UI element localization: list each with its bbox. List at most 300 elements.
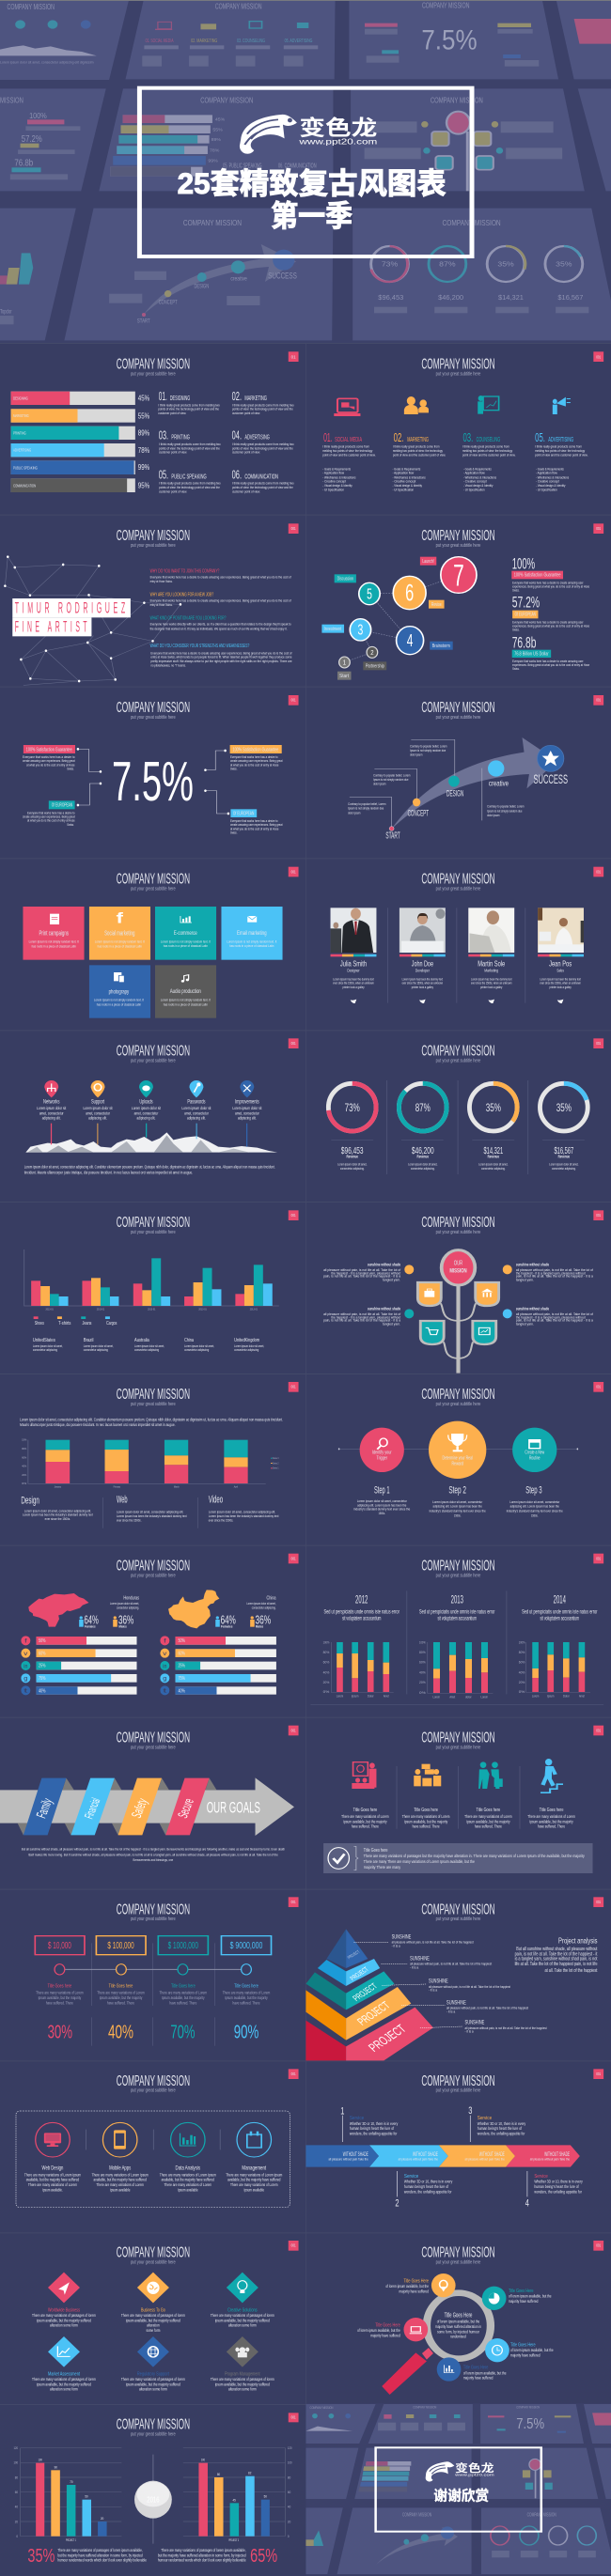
panel: road to success slide (348, 695, 603, 841)
pyramid notes: - it is a (410, 1965, 419, 1969)
heading: put your great subtitle here (131, 2260, 176, 2265)
heading (421, 1042, 495, 1063)
pin: improvements: amet, consectetur (235, 1111, 259, 1116)
bubble labels: Investment (324, 627, 341, 632)
diamond: business to go: Business To Go (141, 2308, 165, 2313)
statistics: 57.2% (512, 594, 540, 611)
milestone text: have suffered. There (107, 2001, 134, 2006)
chevron band: all pleasure without pain Take the (530, 2157, 570, 2162)
intro text: Lorem ipsum dolor sit amet, consectetur adipiscing elit. Curabitur elementum posuere pretium. Quisque nibh dolor, dignissim ac dignissim ut, luctus ac urna. Aliquam aliquet non massa quis tincidunt. (20, 1418, 283, 1422)
marker 4: human being's heart the lure of (534, 2184, 579, 2190)
page badge: 001 (291, 2072, 296, 2077)
skill: web design: available, but the majority have suffered (26, 2178, 79, 2182)
country notes: consectetur adipiscing (134, 1347, 159, 1352)
milestone notes: Ipsum is not simply random due (373, 777, 409, 782)
name card (12, 598, 131, 636)
pin: networks: adipiscing elit. (42, 1116, 61, 1121)
bar chart: 2013-01 (97, 1308, 104, 1311)
heading: put your great subtitle here (131, 887, 176, 892)
numbered services text: I think really great products come from melding two (159, 481, 221, 486)
note: top left: the happiest - it is a tangled yarn, pleasures without (331, 1271, 401, 1275)
numbered services text: customer point of view. (159, 450, 187, 455)
page badge (289, 1210, 299, 1220)
faded slide previews: COMPANY MISSION (200, 96, 253, 105)
legend: Cargos (106, 1321, 117, 1327)
faded previews: COMPANY MISSION (413, 2405, 436, 2409)
faded slide previews: 05. PUBLIC SPEAKING (223, 162, 262, 169)
chevron band: all pleasure without pain Take the (399, 2157, 438, 2162)
stacked bar chart (22, 1438, 266, 1488)
marker 1: 1 (340, 2105, 345, 2117)
faded slide previews: 87% (439, 260, 456, 268)
tile: audio production: has roots in a piece of classical Latin (164, 1002, 208, 1006)
chart: 2012: Ipsum (352, 1694, 359, 1699)
marker 2 (395, 2171, 453, 2209)
diamond: creative solutions (211, 2273, 274, 2328)
icon: presenter (352, 1762, 376, 1789)
milestone notes: dolor ipsum (373, 782, 386, 786)
team member: Martin Sole: Lorem Ipsum has been the dummy text (471, 977, 512, 981)
ring: 35 percent orange: 35% (486, 1101, 501, 1114)
service columns: melding two points of view: the technology (462, 448, 513, 453)
faded previews: 7.5% (516, 2415, 544, 2432)
pin: networks (37, 1080, 67, 1121)
milestone text: There are many variations of Lorem (36, 1991, 84, 1995)
chart: 2013: Lorem (481, 1695, 488, 1699)
bubble labels: Launch! (422, 559, 434, 565)
faded slide previews: 35% (497, 260, 514, 268)
service columns: I think really great products come from (322, 444, 369, 449)
callout: european left: Everyone that works here has a desire to (27, 811, 75, 815)
demographics: China (215, 1596, 276, 1628)
chart: project 1: 20 (15, 2520, 19, 2523)
chart: project 1: 50 (85, 2494, 88, 2499)
numbered services text: 03. (159, 429, 168, 442)
stacked bar chart: 40% (22, 1465, 26, 1468)
page badge (289, 1382, 299, 1392)
heading: put your great subtitle here (131, 1574, 176, 1578)
summary right: but the majority have suffered alteration in some form, by injected (158, 2553, 246, 2558)
numbered services text: 06. (232, 469, 242, 482)
service columns: - Application flow (322, 471, 345, 475)
tile: print campaigns: Lorem Ipsum is not simply random text. It (29, 939, 79, 944)
pin: uploads (132, 1080, 161, 1121)
figure captions: Title Goes here (414, 1808, 438, 1813)
chart: 2014: Dolor (563, 1694, 570, 1699)
ring: 73 percent: consectetur adipiscing. (340, 1166, 365, 1171)
pin: passwords: Passwords (187, 1099, 206, 1105)
skill: web design: There are many variations of Lorem (28, 2182, 77, 2188)
faded slide previews: 73% (382, 260, 399, 268)
service columns: 01. (323, 431, 333, 445)
amounts: $ 1000,000 (168, 1941, 198, 1951)
magnifier glass: some form, by injected humour (437, 2330, 479, 2335)
country notes: consectetur adipiscing (234, 1347, 259, 1352)
skill: management (226, 2122, 282, 2193)
callout: european right: Swiss. (230, 830, 237, 835)
social bars: Honduras: g (24, 1676, 28, 1682)
country notes: UnitedStates (33, 1338, 55, 1343)
panel: money timeline slide: COMPANY MISSION (117, 1901, 190, 1917)
leader lines (350, 739, 482, 827)
questions and answers: entry at Hose Swiss, which tends to put people forced to fit. When talented people fit we'll together they produce some (150, 655, 292, 660)
pyramid notes: all pleasure without pain, is not life at all. Take the lot of the happiest (465, 2025, 547, 2030)
bubble chain: 4 (407, 631, 414, 650)
service columns: - Creative concept (392, 479, 416, 484)
country notes: consectetur adipiscing (84, 1347, 108, 1352)
team member: John Doe: Developer (415, 969, 430, 973)
callout: satisfaction left: at what you do is the cost of entry at Hose (26, 763, 75, 767)
ribbon folds (18, 1778, 216, 1835)
pin: support: Support (91, 1099, 104, 1105)
service columns: - Goals & Requirements (463, 467, 492, 471)
bar chart: 2013-01 (148, 1308, 155, 1311)
panel: yearly charts slide: COMPANY MISSION (421, 1557, 495, 1574)
heading: put your great subtitle here (436, 887, 480, 892)
figure captions: Title Goes here (540, 1808, 563, 1813)
summary left (27, 2544, 147, 2566)
icon: megaphone (553, 397, 571, 414)
bubble labels: Start (339, 674, 349, 679)
brand logo small: 变色龙 (455, 2461, 494, 2475)
tile: social marketing: has roots in a piece of classical Latin (98, 944, 142, 949)
chart: project 1: 100 (39, 2458, 42, 2462)
faded slide previews: CONCEPT (159, 298, 178, 305)
pyramid notes: all pleasure without pain, is not life at all. Take the lot of the happiest (392, 1940, 474, 1945)
summary right: 65% (250, 2544, 277, 2566)
name card: FINE ARTIST (15, 618, 90, 635)
skill: management: available, but the majority have suffered (227, 2178, 281, 2182)
caption (22, 1847, 285, 1862)
tile: photography: photograpy (109, 987, 129, 995)
heading: put your great subtitle here (436, 2088, 480, 2093)
page badge (593, 1382, 603, 1392)
bubble labels: Partnership (366, 663, 384, 669)
page badge (289, 1038, 299, 1048)
panel: pyramid slide (306, 1897, 603, 2060)
panel: money timeline slide (35, 1897, 299, 2046)
faded slide previews: 76.8b (14, 159, 33, 168)
ring: 35 percent orange (469, 1083, 517, 1171)
progress bars: 45% (138, 394, 150, 402)
chart: project 1 (14, 2445, 121, 2542)
diamond: market assessment: ipsum available, but the majority suffered (37, 2382, 91, 2387)
callout: european right: Of EUROPEAN (233, 812, 254, 816)
statistics: Swiss. (512, 666, 520, 671)
milestone notes: Contrary to popular belief, Lorem (487, 804, 525, 809)
diamond: program management: Program Management (225, 2372, 260, 2377)
country notes: Lorem ipsum dolor sit amet, (134, 1343, 164, 1348)
diamond: creative solutions: There are many variations of passages of lorem (211, 2313, 274, 2319)
summary left: humour randomised words which don't look even slightly believable (57, 2558, 147, 2563)
service columns: - Visual design & Identity (463, 483, 494, 488)
faded slide previews (0, 2, 611, 324)
caption: Lorem ipsum dolor sit amet, consectetur adipiscing elit. Curabitur elementum posuere pretium. Quisque nibh dolor, dignissim ac dignissim ut, luctus ac urna. Aliquam aliquet non massa quis tincidunt. (24, 1165, 275, 1170)
panel: four skills slide (16, 2069, 299, 2208)
panel: projects chart slide (14, 2413, 299, 2566)
connector dots (77, 748, 229, 815)
marker 2: wonders, the unfailing appetite for (404, 2190, 452, 2195)
pin: support: adipiscing elit. (88, 1116, 107, 1121)
chart: 2013: sit voluptatem accusantium (438, 1616, 477, 1622)
panel: goals arrow slide (0, 1726, 299, 1862)
team member: Julia Smith: Designer (347, 969, 360, 973)
dashed frame (16, 2111, 290, 2208)
step 2: Determine your Real (443, 1456, 473, 1461)
tile: social marketing: f (117, 909, 123, 926)
panel: mountain pins slide (24, 1038, 299, 1175)
progress bars: PUBLIC SPEAKING (13, 466, 38, 471)
pyramid notes: - it is a (446, 2010, 456, 2013)
tile: print campaigns: has roots in a piece of classical Latin (32, 944, 76, 949)
milestone text: have suffered. There (46, 2001, 73, 2006)
row group: slides 21-24 (16, 2069, 603, 2395)
marker 1: Service (350, 2116, 365, 2121)
faded slide previews: 03. COUNSELING (237, 39, 265, 44)
stacked bar chart: March (174, 1485, 180, 1488)
demographics: Honduras: Honduras (123, 1596, 139, 1601)
questions and answers: entry at Hose Swiss. (150, 579, 173, 583)
questions and answers: the designer that worked on it. It's key as individuals. We spend as much of our life working that we'd best enjoy it. (150, 627, 288, 630)
step 1: Identify your (372, 1451, 392, 1455)
team member: Martin Sole (468, 908, 514, 1003)
big grey arrow (0, 1777, 294, 1836)
tile: email marketing: has roots in a piece of classical Latin (229, 943, 274, 948)
faded slide previews: 35% (556, 260, 572, 268)
page badge (289, 2413, 299, 2422)
social bars: Honduras: 40% (39, 1689, 46, 1694)
icon: people (404, 396, 429, 414)
heading (117, 1901, 190, 1922)
pyramid tier 5: PROJECT (366, 2023, 410, 2055)
service columns: I think really great products come from (462, 444, 509, 449)
progress bars: 55% (138, 411, 150, 420)
chart: project 1: 100 (14, 2460, 19, 2465)
chart: project 1: 60 (15, 2490, 19, 2494)
legend: Jeans (82, 1321, 91, 1327)
note: top right (503, 1263, 593, 1282)
panel: tiles slide: COMPANY MISSION (117, 870, 190, 887)
diamond: business to go: some form (146, 2328, 161, 2334)
panel: mountain pins slide: COMPANY MISSION (117, 1042, 190, 1059)
pyramid notes: - it is a (429, 1988, 438, 1993)
diamond: worldwide business: There are many variations of passages of lorem (32, 2313, 96, 2319)
faded slide previews: 06. COMMUNICATION (278, 162, 317, 169)
numbered services text: customer point of view. (232, 411, 260, 415)
marker 1 (340, 2105, 398, 2142)
chart: 2012: 0% (323, 1689, 330, 1694)
heading (117, 1042, 190, 1063)
bubble chain: 6 (405, 580, 414, 606)
chart: 2012: Amet (384, 1694, 389, 1699)
magnifier glass: of lorem ipsum available, but the (437, 2320, 479, 2324)
numbered services text: customer point of view. (158, 411, 186, 415)
percentages: 30% (48, 2021, 72, 2042)
skill: mobile apps (92, 2122, 149, 2193)
bar chart: 2013-01 (198, 1308, 207, 1311)
chart: 2012: 80% (323, 1650, 330, 1654)
page badge: 001 (291, 1729, 296, 1733)
heading: put your great subtitle here (436, 1230, 480, 1235)
service columns: ADVERTISING (548, 436, 573, 443)
panel: three steps slide: COMPANY MISSION (421, 1386, 495, 1403)
ring: 35 percent orange: Revenue (488, 1155, 499, 1159)
heading (117, 1729, 190, 1750)
social bars: China: 25% (178, 1664, 185, 1668)
numbered services text: customer point of view. (232, 489, 260, 493)
chart: project 1: 70 (70, 2479, 73, 2484)
big number: 7.5% (112, 751, 194, 813)
brand logo: 变色龙 (299, 117, 377, 140)
faded slide previews: $16,567 (557, 294, 584, 302)
figure captions: Ipsum available, but the majority (529, 1820, 573, 1824)
figure captions: have suffered. There (352, 1824, 379, 1829)
faded previews: COMPANY MISSION (516, 2405, 540, 2409)
figure captions: Ipsum available, but the majority (343, 1820, 387, 1824)
numbered services text: PRINTING (171, 433, 190, 441)
progress bars: DESIGNING (13, 396, 28, 401)
heading: put your great subtitle here (436, 1402, 480, 1407)
chart: 2013: Lorem (433, 1695, 440, 1699)
node: chart: of lorem ipsum available, but the (463, 2371, 507, 2376)
step 3: Lorem ipsum dolor sit amet, consectetur (509, 1499, 560, 1504)
ribbon: family (24, 1778, 66, 1835)
pyramid notes: SUNSHINE (429, 1977, 448, 1984)
tree crown: our mission (442, 1250, 475, 1285)
progress bars: PRINTING (13, 431, 26, 436)
page badge: 001 (291, 2415, 296, 2420)
heading (117, 2243, 190, 2265)
service columns: - Application flow (392, 471, 415, 475)
chart: project 1: 20 (101, 2516, 104, 2521)
marker 1: human being's heart the lure of (350, 2126, 394, 2132)
pin: passwords: Lorem ipsum dolor sit (181, 1106, 212, 1111)
numbered services text: 04. (232, 429, 242, 442)
heading: put your great subtitle here (131, 1916, 176, 1922)
page badge: 001 (291, 2243, 296, 2248)
skill: mobile apps: There are many variations of Lorem Ipsum (92, 2173, 149, 2178)
page badge (593, 523, 603, 534)
column: video: ever since the 1500s. (209, 1518, 233, 1523)
step 1: industry's standard dummy text ever since the (353, 1507, 411, 1512)
step 3: adipiscing elit. Lorem Ipsum has been the (510, 1504, 559, 1509)
chart: 2013 (419, 1593, 495, 1699)
step 3: industry's standard dummy text ever since the (507, 1509, 563, 1513)
page badge: 001 (291, 1213, 296, 1218)
tile: social marketing: Social marketing (104, 929, 134, 937)
demographics: China: Lorem ipsum dolor sit amet, (246, 1601, 275, 1606)
mountain range (25, 1132, 277, 1153)
pyramid notes (392, 1932, 547, 2034)
numbered services text: points of view: the technology point of view and the (232, 485, 293, 489)
country notes: UnitedKingdom (234, 1338, 259, 1343)
chart: project 2: 80 (217, 2472, 221, 2476)
panel: four services slide: COMPANY MISSION (421, 355, 495, 372)
page badge (593, 2241, 603, 2251)
chart: 2014: Ipsum (547, 1694, 555, 1699)
panel: projects chart slide: COMPANY MISSION (117, 2415, 190, 2432)
numbered services text: I think really great products come from melding two (232, 481, 294, 486)
tile: photography (89, 965, 150, 1018)
caption: Bereavements and blessings, one (133, 1857, 174, 1862)
ribbon: safety: Safety (128, 1796, 150, 1820)
marker 4: Service (534, 2174, 548, 2180)
social bars: Honduras: v (24, 1650, 28, 1657)
chart: 2014: 100% (519, 1640, 525, 1644)
chart: 2014 (519, 1593, 598, 1699)
chart: 2012: Dolor (368, 1694, 374, 1699)
intro text (20, 1418, 283, 1428)
numbered services text: DESIGNING (170, 395, 190, 402)
page badge (289, 695, 299, 706)
faded slide previews: 100% (29, 112, 47, 121)
chart: 2012: sit voluptatem accusantium (342, 1616, 382, 1622)
tile: photography: Lorem Ipsum is not simply random text. It (94, 998, 144, 1001)
social bars: China: 60% (178, 1652, 185, 1656)
diamond: program management (211, 2336, 274, 2392)
demographics: China: China (267, 1596, 276, 1601)
step 2: 1500s. (454, 1513, 461, 1517)
step 3: 1500s. (531, 1513, 538, 1517)
milestone text: Ipsum available, but the majority (100, 1995, 143, 2001)
faded slide previews: COMPANY MISSION (183, 219, 242, 228)
chart: 2012: 20% (323, 1680, 330, 1684)
node: laptop: Title Goes Here (375, 2323, 400, 2328)
chevron band: WITHOUT SHADE (479, 2150, 505, 2158)
tile: audio production: Audio production (170, 987, 201, 995)
legend: Series 2 (273, 1462, 279, 1465)
team member: John Doe: John Doe (412, 959, 433, 969)
diamond: creative solutions: Creative Solutions (227, 2308, 258, 2313)
percentages: 90% (234, 2021, 258, 2042)
callout: european right: Everyone that works here has a desire to (230, 818, 278, 823)
skill: web design: There are many variations of Lorem Ipsum (24, 2173, 81, 2178)
chart: 2014: 0% (519, 1689, 525, 1694)
milestone text: Ipsum available, but the majority (225, 1995, 268, 2001)
chart: 2012: Lorem (337, 1694, 344, 1699)
numbered services text: points of view: the technology point of view and the (232, 446, 293, 450)
service columns: - Application flow (536, 471, 557, 475)
node: pie (482, 2287, 552, 2310)
diamond: creative solutions: ipsum available, but the majority suffered (215, 2319, 270, 2323)
heading: put your great subtitle here (131, 543, 176, 549)
country notes: Lorem ipsum dolor sit amet, (184, 1343, 214, 1348)
skill: web design (24, 2122, 81, 2193)
faded slide previews: COMPANY MISSION (215, 2, 262, 10)
callout box with check: majority There are many (364, 1865, 400, 1870)
node: pie: of lorem ipsum available, but the (509, 2294, 552, 2299)
column: design: Lorem ipsum dolor sit amet, consectetur adipiscing elit. (24, 1509, 91, 1513)
panel: skill bars slide: COMPANY MISSION (117, 355, 190, 372)
tile: print campaigns (23, 907, 85, 960)
faded slide previews: DESIGN (194, 284, 209, 289)
page badge (289, 351, 299, 362)
amounts (48, 1941, 262, 1951)
chart: 2012: Sed ut perspiciatis unde omnis iste natus error (323, 1609, 400, 1615)
bubble labels: Revise (431, 602, 442, 608)
milestone notes: Contrary to popular belief, Lorem (348, 801, 386, 806)
node: location: majority have suffered (399, 2289, 429, 2294)
chart: 2013: Amet (449, 1695, 456, 1699)
ribbon: financial: Financial (82, 1796, 103, 1820)
faded previews (306, 2405, 611, 2565)
numbered services text: points of view: the technology point of view and the (159, 485, 220, 489)
diamond: market assessment: There are many variations of passages of lorem (32, 2377, 96, 2382)
team member: Julia Smith: Julia Smith (340, 959, 367, 969)
diamond: market assessment: Market Assessment (48, 2372, 80, 2377)
percentages (48, 2021, 258, 2042)
heading: put your great subtitle here (436, 715, 480, 721)
